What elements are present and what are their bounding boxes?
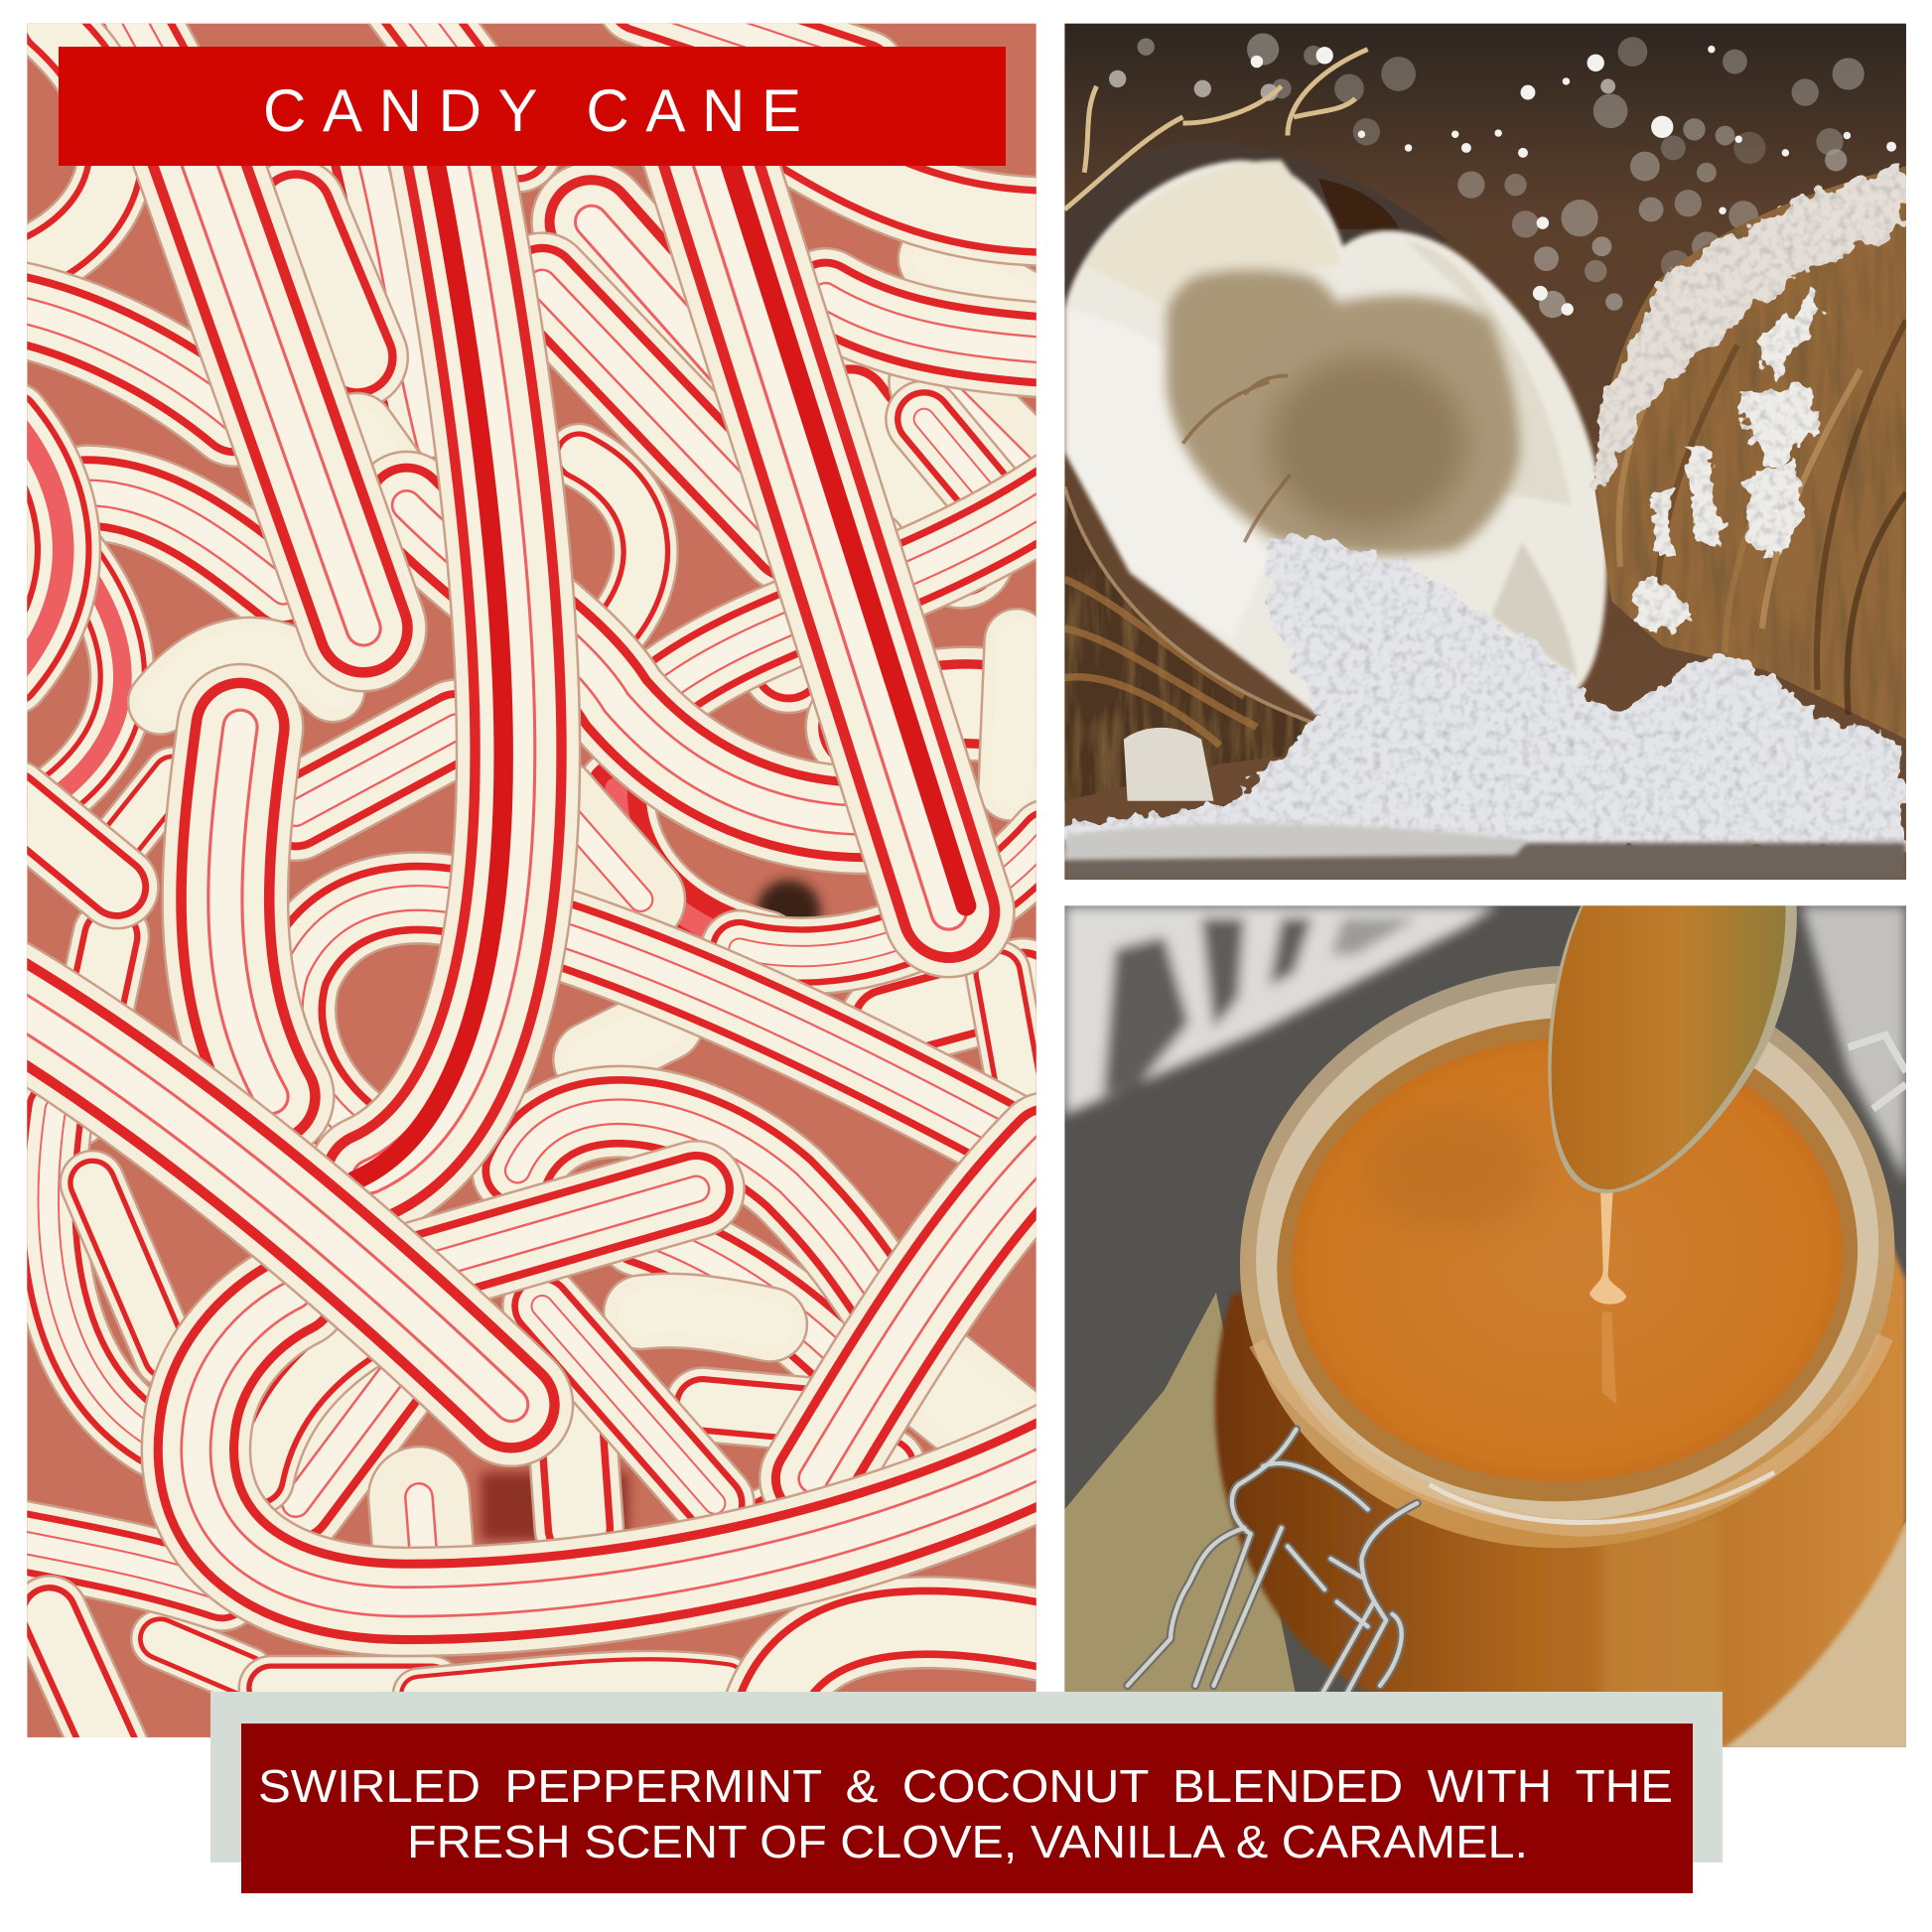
description backing panel: [210, 1692, 1723, 1863]
cane: large bottom hook: [196, 1294, 1059, 1601]
cane: lower horizontal stub: [419, 1189, 696, 1269]
description line 1: SWIRLED PEPPERMINT & COCONUT BLENDED WITH THE: [258, 1760, 1673, 1812]
coconut right: white fluff: [1594, 167, 1906, 486]
parchment paper: [1064, 1293, 1307, 1747]
cane: main vertical: [354, 123, 518, 1180]
jar rim: [1211, 933, 1924, 1581]
cane: short stick left: [225, 727, 271, 1097]
coconut left: lower shell: [1064, 486, 1324, 801]
patterned cloth: [1064, 905, 1497, 1115]
cane: lower right diagonal: [813, 1146, 1047, 1478]
title text: CANDY CANE: [263, 77, 801, 144]
coconut right: [1594, 167, 1906, 740]
sharp white droplets: [1251, 46, 1896, 316]
cane: upper left diagonal: [185, 123, 363, 628]
description box: [241, 1724, 1693, 1893]
jar glass front band: [1257, 1337, 1885, 1528]
wire hinge right: [1849, 1035, 1906, 1109]
panel: caramel jar photo: [1064, 905, 1924, 1750]
cane: hook behind centre: [290, 897, 1023, 1146]
fibres: [1064, 50, 1368, 209]
coconut left: shell rim: [1064, 142, 1448, 302]
bokeh droplets: [1109, 34, 1864, 344]
table surface: [1064, 843, 1906, 880]
spoon: [1548, 905, 1797, 1193]
coconut left: cavity: [1167, 270, 1520, 555]
cane: middle curve: [407, 505, 888, 820]
panel: coconut photo: [1064, 24, 1906, 880]
jar body: [1215, 1245, 1906, 1750]
description line 2: FRESH SCENT OF CLOVE, VANILLA & CARAMEL.: [407, 1816, 1528, 1867]
cane: long right diagonal: [702, 129, 966, 911]
wire bail clasp: [1128, 1430, 1417, 1701]
title banner: [59, 47, 1006, 166]
caramel surface: [1277, 1019, 1859, 1500]
panel: candy cane photo: [0, 0, 1059, 1749]
caramel drip: [1589, 1192, 1626, 1305]
coconut left: white flesh ring: [1064, 160, 1606, 763]
cane: lower left diagonal: [0, 998, 511, 1405]
towel right: [1801, 905, 1906, 1182]
powder pile: [1064, 532, 1906, 857]
